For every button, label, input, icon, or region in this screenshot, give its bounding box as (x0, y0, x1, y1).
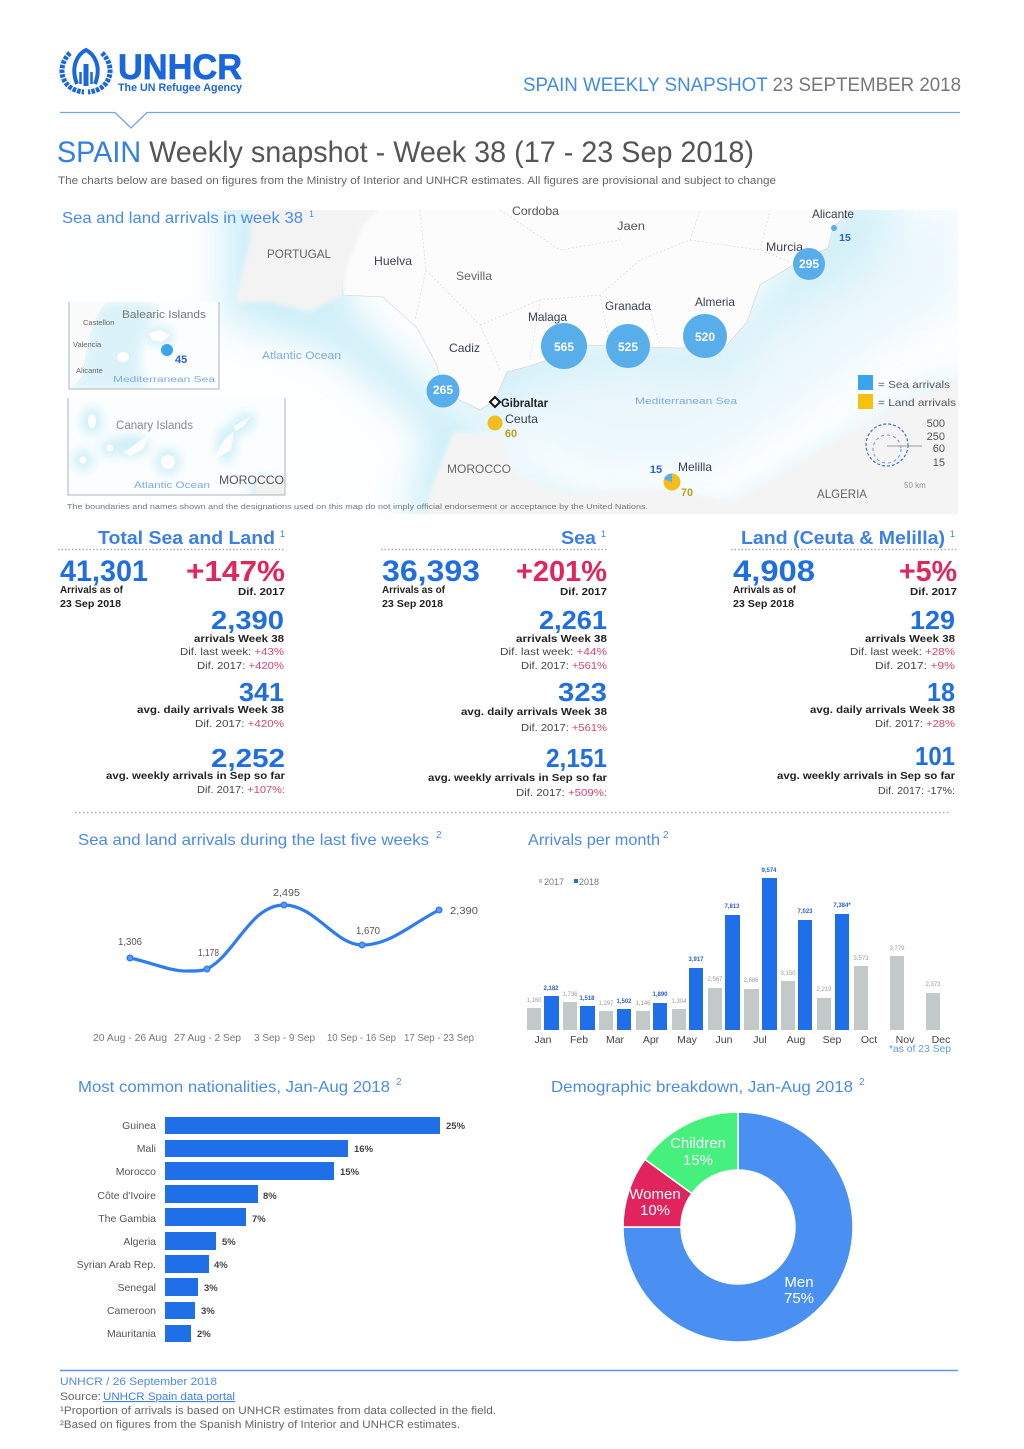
panel: Total Sea and Land: 2,390 (211, 605, 284, 635)
place labels: Murcia (766, 240, 803, 254)
donut chart: demographic breakdown (623, 1112, 853, 1342)
panel: Total Sea and Land: Dif. last week: +43% (180, 646, 284, 658)
bar chart: arrivals per month: 3,150 (780, 971, 796, 977)
line chart: five weeks: 2,495 (273, 888, 300, 899)
panel: Land (Ceuta and Melilla): 101 (915, 741, 955, 771)
panel: Total Sea and Land: 2,252 (211, 743, 285, 773)
panel: Land (Ceuta and Melilla): avg. daily arrivals Week 38 (810, 704, 955, 716)
footer (60, 1376, 496, 1431)
donut chart: demographic breakdown: 10% (640, 1202, 670, 1219)
place labels: MOROCCO (447, 462, 511, 476)
bar chart: arrivals per month: Sep (823, 1034, 841, 1046)
panel: Total Sea and Land: Arrivals as of (60, 584, 123, 596)
bar chart: nationalities (77, 1117, 466, 1342)
panel: Land (Ceuta and Melilla): Dif. 2017 (910, 586, 957, 598)
panel: Land (Ceuta and Melilla): Dif. 2017: +28% (875, 718, 955, 730)
proportional bubbles: 60 (505, 428, 517, 440)
bar chart: arrivals per month: Feb (570, 1034, 588, 1046)
panel: Sea: Dif. 2017: +561% (521, 722, 607, 734)
panel: Total Sea and Land (58, 527, 285, 796)
panel: Total Sea and Land: avg. daily arrivals Week 38 (137, 704, 284, 716)
bar chart: nationalities: Mali (137, 1143, 156, 1155)
bar chart: arrivals per month: 3,573 (853, 956, 869, 962)
place labels: Huelva (374, 254, 412, 268)
Balearic inset: Mediterranean Sea (113, 375, 216, 384)
place labels: Alicante (812, 207, 854, 221)
footer: UNHCR / 26 September 2018 (60, 1376, 217, 1388)
panel: Total Sea and Land: +147% (186, 556, 285, 588)
panel: map of arrivals: 1 (309, 209, 314, 219)
panel: Land (Ceuta and Melilla): Dif. last week: +28% (850, 646, 955, 658)
header rule with notch (60, 112, 960, 128)
Balearic inset (69, 302, 219, 389)
place labels: 50 km (904, 481, 926, 490)
heading: arrivals per month: Arrivals per month (528, 832, 660, 849)
text: 2 (663, 830, 669, 841)
province borders (415, 210, 790, 370)
map legend: = Land arrivals (878, 397, 956, 409)
map legend: 15 (933, 457, 945, 469)
line chart: five weeks: 10 Sep - 16 Sep (327, 1033, 396, 1044)
subtitle: The charts below are based on figures from the Ministry of Interior and UNHCR estimates. All figures are provisional and subject to change (58, 175, 776, 187)
bar chart: arrivals per month: 1,890 (652, 992, 668, 998)
place labels: Cordoba (512, 204, 559, 218)
proportional bubbles (426, 225, 851, 499)
bar chart: arrivals per month: Jul (753, 1034, 767, 1046)
panel: Total Sea and Land: Dif. 2017: +420% (197, 660, 284, 672)
bar chart: arrivals per month: 2,567 (707, 977, 723, 983)
panel: Land (Ceuta and Melilla) (731, 527, 957, 797)
bar chart: arrivals per month: Jan (535, 1034, 552, 1046)
bar chart: arrivals per month: 7,813 (724, 904, 740, 910)
bar chart: arrivals per month: 2,686 (743, 978, 759, 984)
map legend: 60 (933, 443, 945, 455)
bar chart: nationalities: Guinea (122, 1120, 156, 1132)
bar chart: arrivals per month: 7,023 (797, 909, 813, 915)
Balearic inset: 45 (175, 354, 187, 366)
bar chart: arrivals per month: 1,304 (671, 999, 687, 1005)
proportional bubbles: 15 (839, 232, 851, 244)
legend: 2017 (544, 877, 564, 887)
main title: SPAIN Weekly snapshot - Week 38 (17 - 23 Sep 2018) (57, 136, 754, 169)
panel: Sea: 1 (601, 529, 606, 539)
panel: Sea: avg. daily arrivals Week 38 (461, 706, 607, 718)
heading: last five weeks: Sea and land arrivals during the last five weeks (78, 832, 429, 849)
bar chart: nationalities: 2% (197, 1329, 211, 1340)
place labels: Cadiz (449, 341, 480, 355)
bar chart: nationalities: 25% (446, 1121, 466, 1132)
place labels: Atlantic Ocean (262, 350, 341, 362)
panel: Sea: 323 (558, 677, 607, 707)
footer: ²Based on figures from the Spanish Ministry of Interior and UNHCR estimates. (60, 1419, 460, 1431)
panel: Land (Ceuta and Melilla): +5% (899, 556, 957, 588)
bar chart: arrivals per month: Oct (861, 1034, 877, 1046)
bar chart: arrivals per month: 1,160 (526, 998, 542, 1004)
bar chart: nationalities: 5% (222, 1237, 236, 1248)
place labels: Malaga (528, 310, 567, 324)
bar chart: arrivals per month: 3,779 (889, 946, 905, 952)
map legend: 250 (927, 431, 945, 443)
bar chart: nationalities: Côte d'Ivoire (97, 1190, 156, 1202)
panel: Sea: +201% (516, 556, 607, 588)
panel: Land (Ceuta and Melilla): 4,908 (733, 555, 815, 588)
heading: Land (Ceuta & Melilla) (741, 527, 945, 548)
Balearic inset: Alicante (76, 366, 103, 375)
logo: UNHCR (62, 48, 243, 94)
panel: Land (Ceuta and Melilla): Dif. 2017: +9% (875, 660, 955, 672)
bar chart: arrivals per month: 2,219 (816, 987, 832, 993)
Canary inset: Canary Islands (116, 420, 193, 432)
panel: Total Sea and Land: arrivals Week 38 (194, 633, 284, 645)
panel: Total Sea and Land: avg. weekly arrivals in Sep so far (106, 770, 285, 782)
text: 2 (859, 1077, 865, 1088)
panel: Land (Ceuta and Melilla): Dif. 2017: -17%: (878, 785, 955, 797)
panel: Land (Ceuta and Melilla): avg. weekly arrivals in Sep so far (777, 770, 955, 782)
bar chart: arrivals per month: Apr (643, 1034, 660, 1046)
proportional bubbles: 265 (433, 383, 453, 397)
bar chart: arrivals per month: 7,384* (833, 903, 851, 909)
panel: Total Sea and Land: 23 Sep 2018 (60, 598, 121, 610)
proportional bubbles: 70 (681, 487, 693, 499)
panel: Total Sea and Land: Dif. 2017: +420% (195, 718, 284, 730)
panel: Sea: 23 Sep 2018 (382, 598, 443, 610)
panel: Total Sea and Land: 41,301 (60, 555, 148, 588)
bar chart: nationalities: The Gambia (98, 1213, 156, 1225)
bar chart: arrivals per month: 9,574 (761, 868, 777, 874)
map disclaimer: The boundaries and names shown and the designations used on this map do not imply official endorsement or acceptance by the United Nations. (67, 504, 648, 511)
donut chart: demographic breakdown: 15% (683, 1152, 713, 1169)
line chart: five weeks: 17 Sep - 23 Sep (404, 1033, 474, 1044)
panel: Sea: 36,393 (382, 555, 480, 588)
land: North Africa (426, 378, 958, 514)
text: 2 (396, 1077, 402, 1088)
heading: demographic: Demographic breakdown, Jan-Aug 2018 (551, 1079, 853, 1096)
proportional bubbles: 565 (554, 340, 574, 354)
bar chart: nationalities: 3% (204, 1283, 218, 1294)
legend (539, 877, 599, 887)
bar chart: nationalities: 16% (354, 1144, 374, 1155)
bar chart: arrivals per month: 2,373 (925, 982, 941, 988)
logo: UNHCR: UNHCR (118, 48, 242, 87)
place labels: Sevilla (456, 269, 492, 283)
bar chart: nationalities: 7% (252, 1214, 266, 1225)
map legend (858, 375, 956, 469)
panel: Land (Ceuta and Melilla): 129 (910, 605, 955, 635)
panel: Sea: Dif. 2017 (560, 586, 607, 598)
bar chart: arrivals per month: Dec (932, 1034, 950, 1046)
panel: Sea: Dif. 2017: +509%: (516, 787, 607, 799)
panel: Sea: Dif. 2017: +561% (521, 660, 607, 672)
bar chart: nationalities: 3% (201, 1306, 215, 1317)
logo: UNHCR: The UN Refugee Agency (118, 82, 243, 94)
panel: Total Sea and Land: Dif. 2017: +107%: (197, 784, 285, 796)
bar chart: nationalities: Morocco (116, 1166, 156, 1178)
bar chart: nationalities: 8% (263, 1191, 277, 1202)
line chart: five weeks: 27 Aug - 2 Sep (174, 1033, 241, 1044)
panel: Sea: Dif. last week: +44% (500, 646, 607, 658)
place labels: Melilla (678, 460, 712, 474)
map legend: 500 (927, 418, 945, 430)
bar chart: arrivals per month: 3,917 (688, 957, 704, 963)
place labels: Gibraltar (501, 396, 548, 410)
bar chart: arrivals per month: Jun (716, 1034, 733, 1046)
bar chart: arrivals per month (526, 868, 951, 1055)
panel: Sea: 2,261 (539, 605, 607, 635)
bar chart: arrivals per month: 1,297 (598, 1001, 614, 1007)
line chart: five weeks (93, 888, 478, 1044)
place labels: Ceuta (505, 412, 538, 426)
bar chart: arrivals per month: 1,146 (635, 1001, 651, 1007)
bar chart: arrivals per month: 1,518 (579, 996, 595, 1002)
footer: UNHCR Spain data portal (103, 1391, 235, 1403)
panel: Land (Ceuta and Melilla): arrivals Week 38 (865, 633, 955, 645)
line chart: five weeks: 1,178 (198, 948, 219, 959)
Balearic inset: Balearic Islands (122, 309, 207, 321)
donut chart: demographic breakdown: Children (670, 1135, 726, 1152)
heading: Total Sea and Land (98, 527, 275, 548)
place labels: ALGERIA (817, 487, 867, 501)
footer: ¹Proportion of arrivals is based on UNHCR estimates from data collected in the field. (60, 1405, 496, 1417)
panel: Total Sea and Land: Dif. 2017 (238, 586, 285, 598)
bar chart: arrivals per month: Nov (896, 1034, 915, 1046)
panel: Land (Ceuta and Melilla): 1 (950, 529, 955, 539)
bar chart: arrivals per month: Mar (606, 1034, 625, 1046)
panel: Total Sea and Land: 1 (280, 529, 285, 539)
map heading: Sea and land arrivals in week 38 (62, 210, 303, 227)
land: Portugal (235, 205, 383, 312)
bar chart: nationalities: Cameroon (107, 1305, 156, 1317)
header title right: SPAIN WEEKLY SNAPSHOT 23 SEPTEMBER 2018 (523, 75, 961, 96)
panel: Sea: avg. weekly arrivals in Sep so far (428, 772, 607, 784)
panel: Sea: arrivals Week 38 (516, 633, 607, 645)
bar chart: arrivals per month: *as of 23 Sep (889, 1043, 951, 1055)
proportional bubbles: 525 (618, 340, 638, 354)
bar chart: arrivals per month: 1,736 (562, 992, 578, 998)
place labels: PORTUGAL (267, 247, 331, 261)
panel: Land (Ceuta and Melilla): 23 Sep 2018 (733, 598, 794, 610)
text: 2 (436, 830, 442, 841)
panel: Sea (381, 527, 607, 799)
place labels (262, 204, 926, 501)
line chart: five weeks: 2,390 (450, 906, 478, 917)
line chart: five weeks: 20 Aug - 26 Aug (93, 1033, 167, 1044)
sea glow (225, 190, 958, 530)
donut chart: demographic breakdown: 75% (784, 1290, 814, 1307)
bar chart: nationalities: Algeria (123, 1236, 156, 1248)
proportional bubbles: 15 (650, 464, 662, 476)
panel: Sea: Arrivals as of (382, 584, 445, 596)
icon: wreath and sheltering hands (62, 50, 110, 92)
line chart: five weeks: 1,670 (356, 926, 380, 937)
place labels: Mediterranean Sea (635, 396, 737, 406)
bar chart: nationalities: 4% (214, 1260, 228, 1271)
panel: map of arrivals (62, 206, 958, 514)
map legend: = Sea arrivals (878, 379, 950, 391)
panel: Land (Ceuta and Melilla): 18 (927, 677, 955, 707)
panel: Sea: 2,151 (546, 743, 607, 773)
heading: Sea (561, 527, 597, 548)
bar chart: arrivals per month: 2,182 (543, 986, 559, 992)
line chart: five weeks: 1,306 (118, 937, 142, 948)
Canary inset: MOROCCO (219, 473, 284, 487)
bar chart: nationalities: Syrian Arab Rep. (77, 1259, 156, 1271)
proportional bubbles: 295 (799, 257, 819, 271)
Canary inset: Atlantic Ocean (134, 480, 210, 491)
donut chart: demographic breakdown: Women (629, 1186, 681, 1203)
heading: nationalities: Most common nationalities, Jan-Aug 2018 (78, 1079, 390, 1096)
Balearic inset: Valencia (73, 340, 102, 349)
footer: Source: (60, 1391, 101, 1403)
panel: Land (Ceuta and Melilla): Arrivals as of (733, 584, 796, 596)
place labels: Almeria (695, 295, 735, 309)
donut chart: demographic breakdown: Men (784, 1274, 814, 1291)
bar chart: arrivals per month: 1,502 (616, 999, 632, 1005)
bar chart: nationalities: Senegal (117, 1282, 156, 1294)
line chart: five weeks: 3 Sep - 9 Sep (254, 1033, 315, 1044)
place labels: Granada (605, 299, 651, 313)
proportional bubbles: 520 (695, 330, 715, 344)
bar chart: nationalities: 15% (340, 1167, 360, 1178)
land: Spain (340, 205, 855, 410)
panel: Total Sea and Land: 341 (239, 677, 284, 707)
legend: 2018 (579, 877, 599, 887)
bar chart: arrivals per month: Aug (787, 1034, 805, 1046)
place labels: Jaen (617, 219, 645, 233)
Canary inset (68, 398, 286, 504)
bar chart: arrivals per month: May (677, 1034, 698, 1046)
bar chart: nationalities: Mauritania (107, 1328, 156, 1340)
Balearic inset: Castellon (83, 318, 114, 327)
